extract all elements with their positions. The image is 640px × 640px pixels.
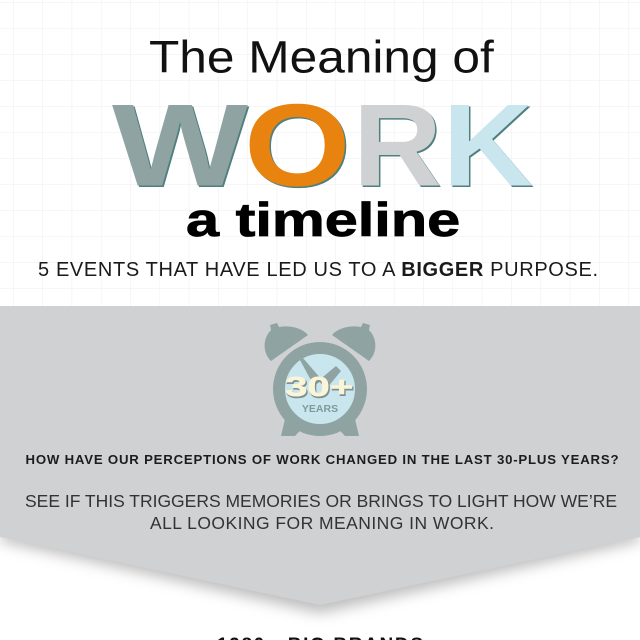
icon: alarm clock: 30+ — [285, 372, 353, 402]
body text: ALL LOOKING FOR MEANING IN WORK. — [150, 513, 494, 533]
title: WORK — [112, 79, 535, 212]
question heading: HOW HAVE OUR PERCEPTIONS OF WORK CHANGED IN THE LAST 30-PLUS YEARS? — [26, 452, 618, 467]
title: WORK: W — [114, 81, 250, 212]
icon: clock hands — [300, 358, 341, 388]
subtitle: a timeline: a timeline — [186, 194, 460, 247]
title: WORK: O — [244, 80, 351, 210]
panel: grey chevron — [0, 306, 640, 605]
body text: SEE IF THIS TRIGGERS MEMORIES OR BRINGS TO LIGHT HOW WE’RE — [25, 491, 617, 511]
title: WORK: K — [442, 79, 533, 211]
title: WORK: W — [112, 79, 248, 210]
icon: left bell — [265, 323, 308, 361]
tagline: 5 EVENTS THAT HAVE LED US TO A BIGGER PURPOSE. — [38, 259, 598, 281]
icon: alarm clock — [265, 323, 375, 436]
title: WORK: R — [353, 80, 442, 211]
title: The Meaning of: The Meaning of — [149, 33, 495, 83]
label: YEARS: YEARS — [302, 403, 338, 415]
icon: right bell — [332, 323, 375, 361]
title: WORK: R — [354, 82, 443, 212]
chevron shadow — [0, 530, 640, 613]
icon: clock feet — [281, 415, 359, 436]
label: 30+: 30+ — [286, 373, 354, 404]
title: WORK: K — [444, 81, 535, 212]
body text — [25, 491, 617, 533]
icon: clock face — [279, 348, 361, 430]
title: WORK: O — [246, 81, 352, 212]
